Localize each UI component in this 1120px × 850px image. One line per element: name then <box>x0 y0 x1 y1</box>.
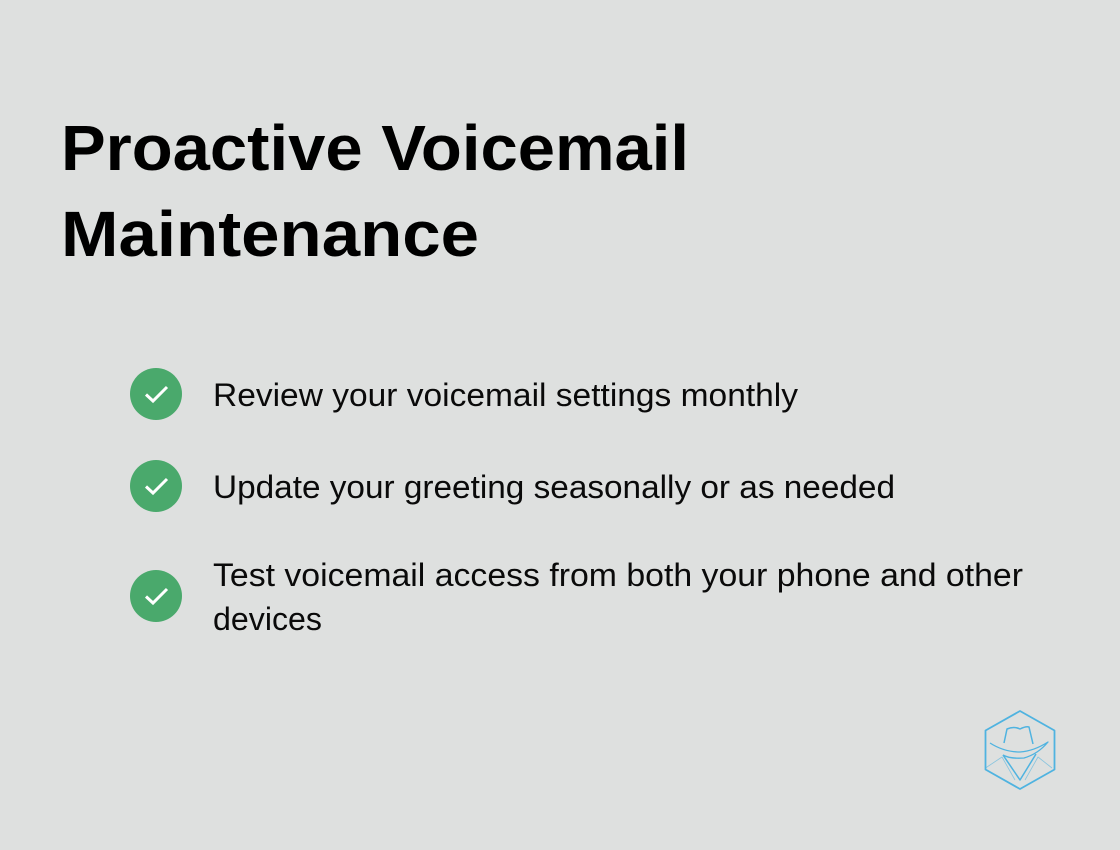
text 3: Test voicemail access from both your phone and other <box>213 557 1023 593</box>
text 3 <box>213 557 1023 637</box>
text 3: devices <box>213 601 322 637</box>
title: Proactive Voicemail <box>61 112 689 184</box>
checklist <box>130 368 1023 637</box>
icon: check 1 <box>130 368 182 420</box>
title: Maintenance <box>61 198 479 270</box>
icon: logo hexagon with hat <box>986 711 1054 789</box>
item 2 <box>130 460 895 512</box>
title <box>61 112 689 270</box>
item 1 <box>130 368 798 420</box>
item 3 <box>130 557 1023 637</box>
icon: check 2 <box>130 460 182 512</box>
icon: check 3 <box>130 570 182 622</box>
text 2: Update your greeting seasonally or as needed <box>213 469 895 505</box>
text 1: Review your voicemail settings monthly <box>213 377 798 413</box>
